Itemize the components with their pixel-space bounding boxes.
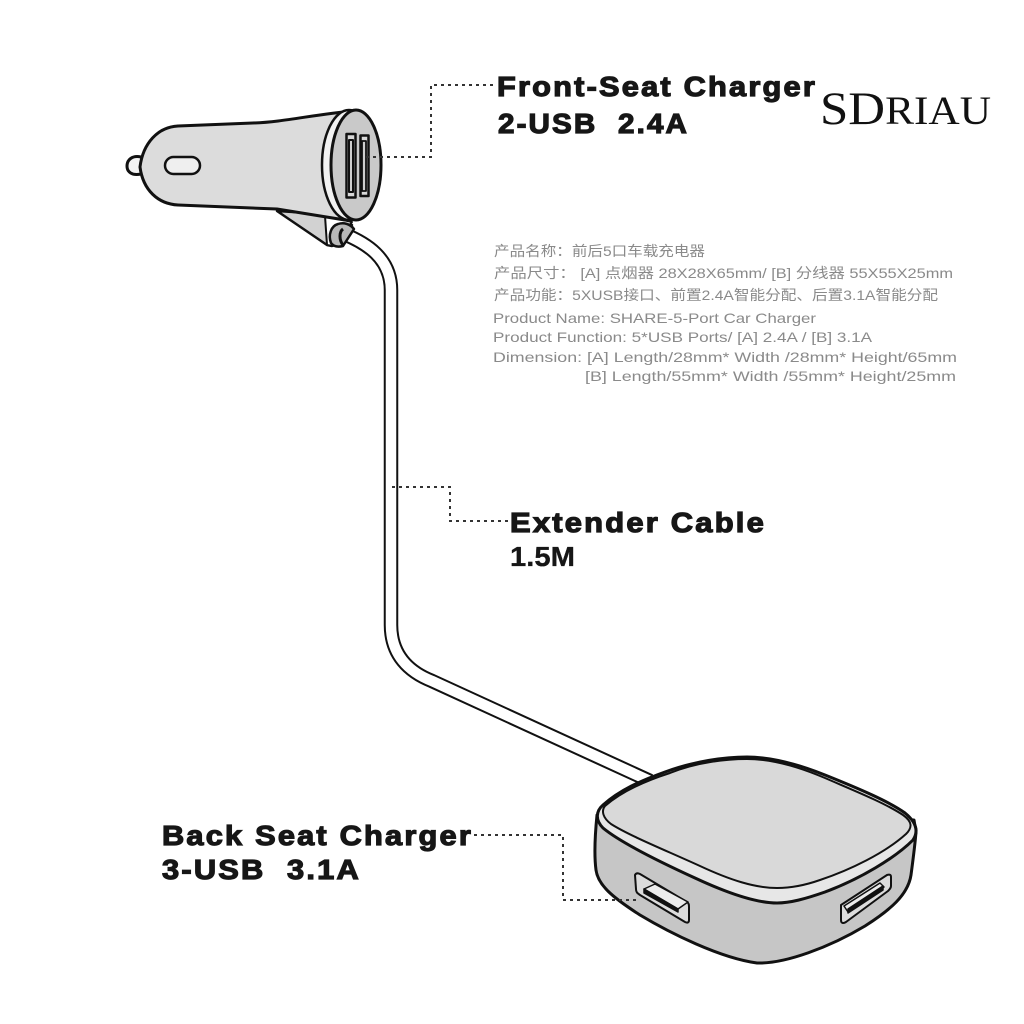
leader line: front-seat — [366, 85, 495, 157]
brand logo: SDRIAU — [820, 83, 991, 135]
leader line: extender cable — [392, 487, 508, 521]
charger tip nub — [127, 157, 141, 175]
heading: extender cable: 1.5M — [510, 541, 575, 572]
charger bracket — [277, 211, 352, 246]
heading: front-seat charger — [497, 71, 817, 139]
heading: front-seat charger: Front-Seat Charger — [497, 71, 817, 102]
USB port 1 — [346, 134, 356, 198]
leader line: back seat — [474, 835, 640, 900]
right USB port — [841, 875, 891, 923]
product specification text — [493, 243, 957, 384]
charger body — [140, 111, 355, 220]
cable connector — [325, 216, 354, 247]
front ring — [322, 110, 376, 220]
heading: extender cable: Extender Cable — [510, 507, 766, 538]
product specification text: Product Name: SHARE-5-Port Car Charger — [493, 310, 816, 326]
icon: back-seat charger hub — [595, 757, 916, 963]
hub body — [595, 815, 916, 963]
product specification text: Dimension: [A] Length/28mm* Width /28mm* Height/65mm — [493, 349, 957, 365]
product specification text: [B] Length/55mm* Width /55mm* Height/25mm — [585, 368, 956, 384]
heading: extender cable — [510, 507, 766, 572]
heading: front-seat charger: 2-USB 2.4A — [498, 108, 689, 139]
product specification text: Product Function: 5*USB Ports/ [A] 2.4A / [B] 3.1A — [493, 329, 873, 345]
heading: back seat charger — [162, 820, 473, 885]
product specification text: 产品尺寸： [A] 点烟器 28X28X65mm/ [B] 分线器 55X55X25mm — [494, 265, 953, 281]
front face — [331, 110, 381, 220]
product specification text: 产品功能：5XUSB接口、前置2.4A智能分配、后置3.1A智能分配 — [494, 287, 938, 303]
hub lid top — [603, 759, 911, 888]
heading: back seat charger: 3-USB 3.1A — [162, 854, 361, 885]
charger vent slot — [165, 157, 200, 174]
USB port 2 — [360, 136, 368, 196]
heading: back seat charger: Back Seat Charger — [162, 820, 473, 851]
product specification text: 产品名称：前后5口车载充电器 — [494, 243, 705, 259]
left USB port — [635, 873, 689, 923]
extender cable — [344, 234, 650, 781]
icon: front-seat car charger — [127, 110, 381, 247]
hub lid rim — [597, 757, 916, 903]
